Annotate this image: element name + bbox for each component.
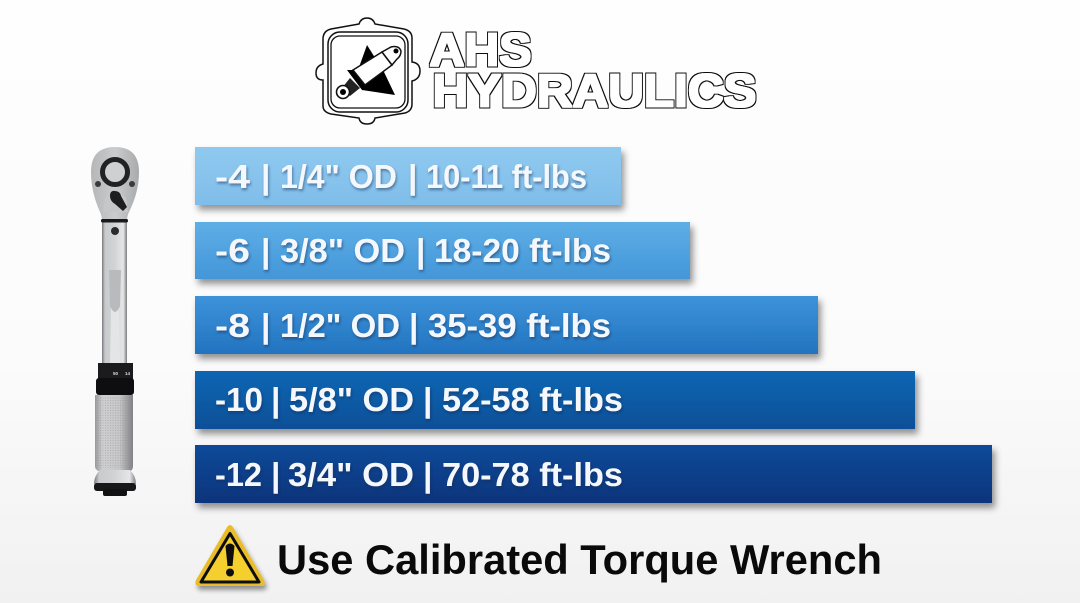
bar: -4 (195, 147, 621, 205)
bar: -4: 10-11 ft-lbs (426, 159, 587, 196)
bar: -6: -6 (215, 233, 250, 270)
bar: -8: 35-39 ft-lbs (428, 308, 611, 345)
bar: -10 (195, 371, 915, 429)
bar: -12: 3/4" OD (288, 457, 414, 494)
bar: -10: -10 (215, 382, 263, 419)
bar: -8: -8 (215, 308, 250, 345)
bar: -8 (195, 296, 818, 354)
bar: -12: | (423, 457, 432, 494)
wrench knurled grip (95, 395, 133, 472)
bar: -12: | (271, 457, 280, 494)
icon: warning triangle (195, 525, 265, 586)
torque wrench illustration (91, 147, 139, 496)
bar: -10: 5/8" OD (289, 382, 414, 419)
warning text: Use Calibrated Torque Wrench (277, 536, 882, 583)
logo text (430, 24, 756, 116)
bar: -12: -12 (215, 457, 262, 494)
bar: -4: -4 (215, 159, 250, 196)
bar: -12: 70-78 ft-lbs (442, 457, 623, 494)
bar: -8: | (261, 308, 270, 345)
bar: -4: | (261, 159, 270, 196)
bar: -10: 52-58 ft-lbs (442, 382, 623, 419)
logo text: AHS (430, 24, 532, 76)
bar: -6: | (416, 233, 425, 270)
wrench black ring (96, 378, 134, 395)
bar: -8: | (409, 308, 418, 345)
bar: -8: 1/2" OD (280, 308, 400, 345)
wrench lever (110, 191, 127, 211)
bar: -6: 18-20 ft-lbs (434, 233, 611, 270)
bar: -6: | (261, 233, 270, 270)
torque wrench illustration: 14 (125, 371, 131, 376)
bar: -10: | (423, 382, 432, 419)
bar: -6 (195, 222, 690, 279)
bar: -4: 1/4" OD (280, 159, 397, 196)
wrench end cap (94, 470, 136, 484)
wrench scale collar (98, 363, 133, 379)
logo: AHS Hydraulics (316, 18, 756, 124)
torque wrench illustration: 50 (113, 371, 119, 376)
logo text: HYDRAULICS (432, 64, 756, 116)
wrench shaft (102, 218, 127, 365)
logo emblem (316, 18, 420, 124)
bar: -6: 3/8" OD (280, 233, 405, 270)
bar: -10: | (271, 382, 280, 419)
bar: -12 (195, 445, 992, 503)
wrench head (91, 147, 139, 221)
bar: -4: | (408, 159, 417, 196)
